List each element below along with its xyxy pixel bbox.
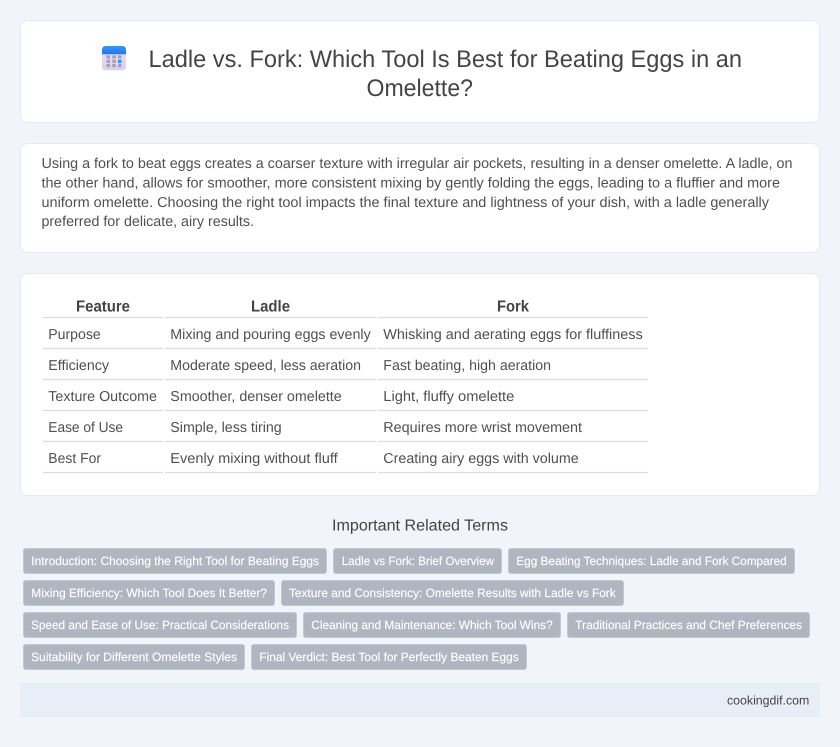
table row: efficiency: Efficiency bbox=[48, 358, 110, 374]
heading: important related terms: Important Related Terms bbox=[332, 518, 508, 534]
tag list: related terms bbox=[24, 548, 810, 670]
text block: introduction paragraph: preferred for delicate, airy results. bbox=[42, 214, 254, 230]
table row: ease of use: Ease of Use bbox=[48, 420, 123, 436]
title: Omelette? bbox=[366, 75, 473, 102]
table row: ease of use: Requires more wrist movement bbox=[383, 420, 582, 436]
table row: best for: Creating airy eggs with volume bbox=[383, 451, 579, 467]
table row: efficiency: Moderate speed, less aeration bbox=[170, 358, 361, 374]
table row: texture outcome bbox=[48, 389, 514, 405]
table row: best for: Evenly mixing without fluff bbox=[170, 451, 339, 467]
tag: Mixing Efficiency: Which Tool Does It Better? bbox=[31, 586, 267, 600]
panel: introduction bbox=[20, 144, 820, 252]
table row: purpose: Whisking and aerating eggs for fluffiness bbox=[383, 327, 643, 343]
table row: efficiency: Fast beating, high aeration bbox=[383, 358, 551, 374]
table header row bbox=[76, 298, 529, 316]
tag: Ladle vs Fork: Brief Overview bbox=[342, 554, 494, 568]
panel: header bbox=[20, 20, 820, 122]
table row: purpose bbox=[48, 327, 643, 343]
tag bbox=[304, 612, 560, 638]
table row: ease of use bbox=[48, 420, 582, 436]
table row: purpose: Mixing and pouring eggs evenly bbox=[170, 327, 371, 343]
table row: texture outcome: Texture Outcome bbox=[48, 389, 157, 405]
footer bbox=[20, 683, 820, 717]
text block: introduction paragraph: Using a fork to beat eggs creates a coarser texture with irregular air pockets, resulting in a denser omelette. A ladle, on bbox=[42, 156, 792, 172]
tag: Cleaning and Maintenance: Which Tool Wins? bbox=[311, 618, 553, 632]
tag bbox=[508, 548, 794, 574]
tag bbox=[334, 548, 502, 574]
tag bbox=[24, 580, 274, 606]
tag bbox=[24, 612, 296, 638]
tag bbox=[252, 644, 526, 670]
tag bbox=[24, 644, 244, 670]
table header row: Ladle bbox=[251, 298, 290, 316]
table header row: Fork bbox=[497, 298, 529, 316]
tag bbox=[282, 580, 624, 606]
table row: ease of use: Simple, less tiring bbox=[170, 420, 282, 436]
text block: introduction paragraph: the other hand, allows for smoother, more consistent mixing by gently folding the eggs, leading to a fluffier and more bbox=[42, 176, 780, 192]
tag: Egg Beating Techniques: Ladle and Fork Compared bbox=[516, 554, 787, 568]
table row: purpose: Purpose bbox=[48, 327, 101, 343]
tag bbox=[24, 548, 326, 574]
title bbox=[148, 46, 742, 102]
footer: cookingdif.com bbox=[727, 693, 809, 707]
table row: texture outcome: Light, fluffy omelette bbox=[383, 389, 514, 405]
tag: Traditional Practices and Chef Preferences bbox=[575, 618, 802, 632]
tag: Final Verdict: Best Tool for Perfectly Beaten Eggs bbox=[259, 650, 519, 664]
table header row: Feature bbox=[76, 298, 130, 316]
table row: efficiency bbox=[48, 358, 551, 374]
tag: Texture and Consistency: Omelette Results with Ladle vs Fork bbox=[289, 586, 617, 600]
panel: comparison table bbox=[20, 274, 820, 496]
tag: Introduction: Choosing the Right Tool for Beating Eggs bbox=[31, 554, 319, 568]
title: Ladle vs. Fork: Which Tool Is Best for Beating Eggs in an bbox=[148, 46, 742, 73]
tag bbox=[568, 612, 810, 638]
table row: texture outcome: Smoother, denser omelette bbox=[170, 389, 342, 405]
icon: calendar bbox=[102, 46, 126, 70]
table row: best for: Best For bbox=[48, 451, 101, 467]
tag: Suitability for Different Omelette Styles bbox=[31, 650, 237, 664]
table row: best for bbox=[48, 451, 579, 467]
text block: introduction paragraph: uniform omelette. Choosing the right tool impacts the final texture and lightness of your dish, with a ladle generally bbox=[42, 195, 770, 211]
text block: introduction paragraph bbox=[42, 156, 792, 230]
tag: Speed and Ease of Use: Practical Considerations bbox=[31, 618, 289, 632]
